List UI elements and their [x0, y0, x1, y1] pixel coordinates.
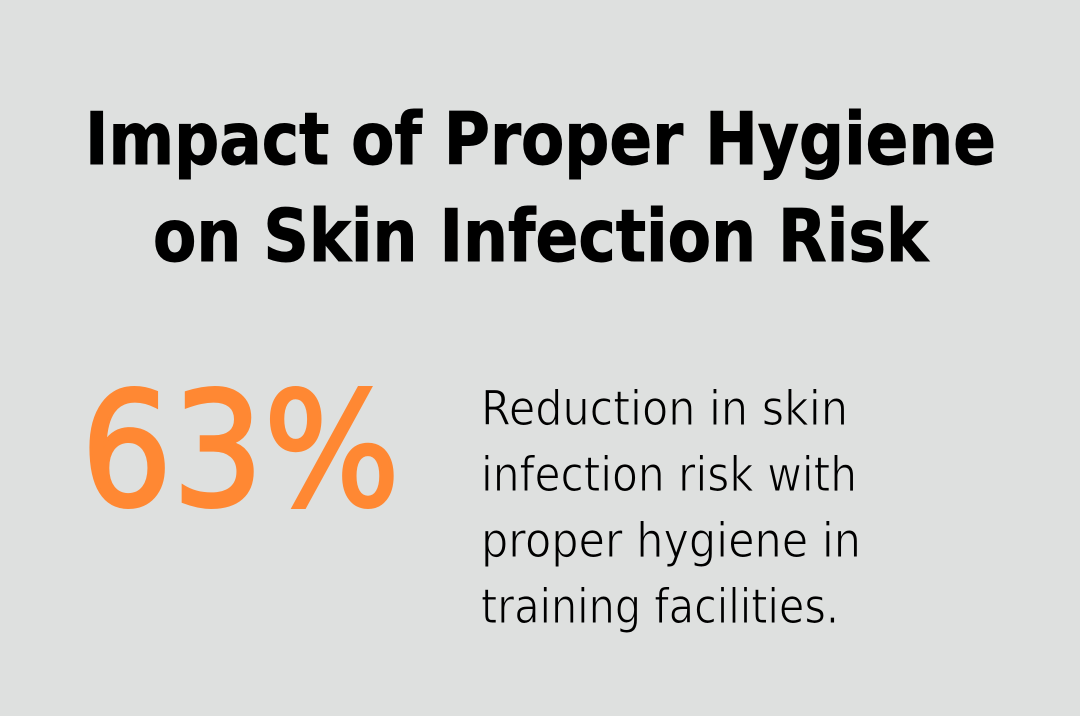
title — [85, 97, 996, 278]
statistic description — [481, 381, 861, 635]
title: on Skin Infection Risk — [153, 194, 930, 278]
statistic description: proper hygiene in — [481, 513, 861, 569]
statistic: 63%: 63% — [81, 359, 400, 543]
statistic description: infection risk with — [481, 447, 857, 503]
statistic description: training facilities. — [481, 579, 839, 635]
statistic description: Reduction in skin — [481, 381, 848, 437]
